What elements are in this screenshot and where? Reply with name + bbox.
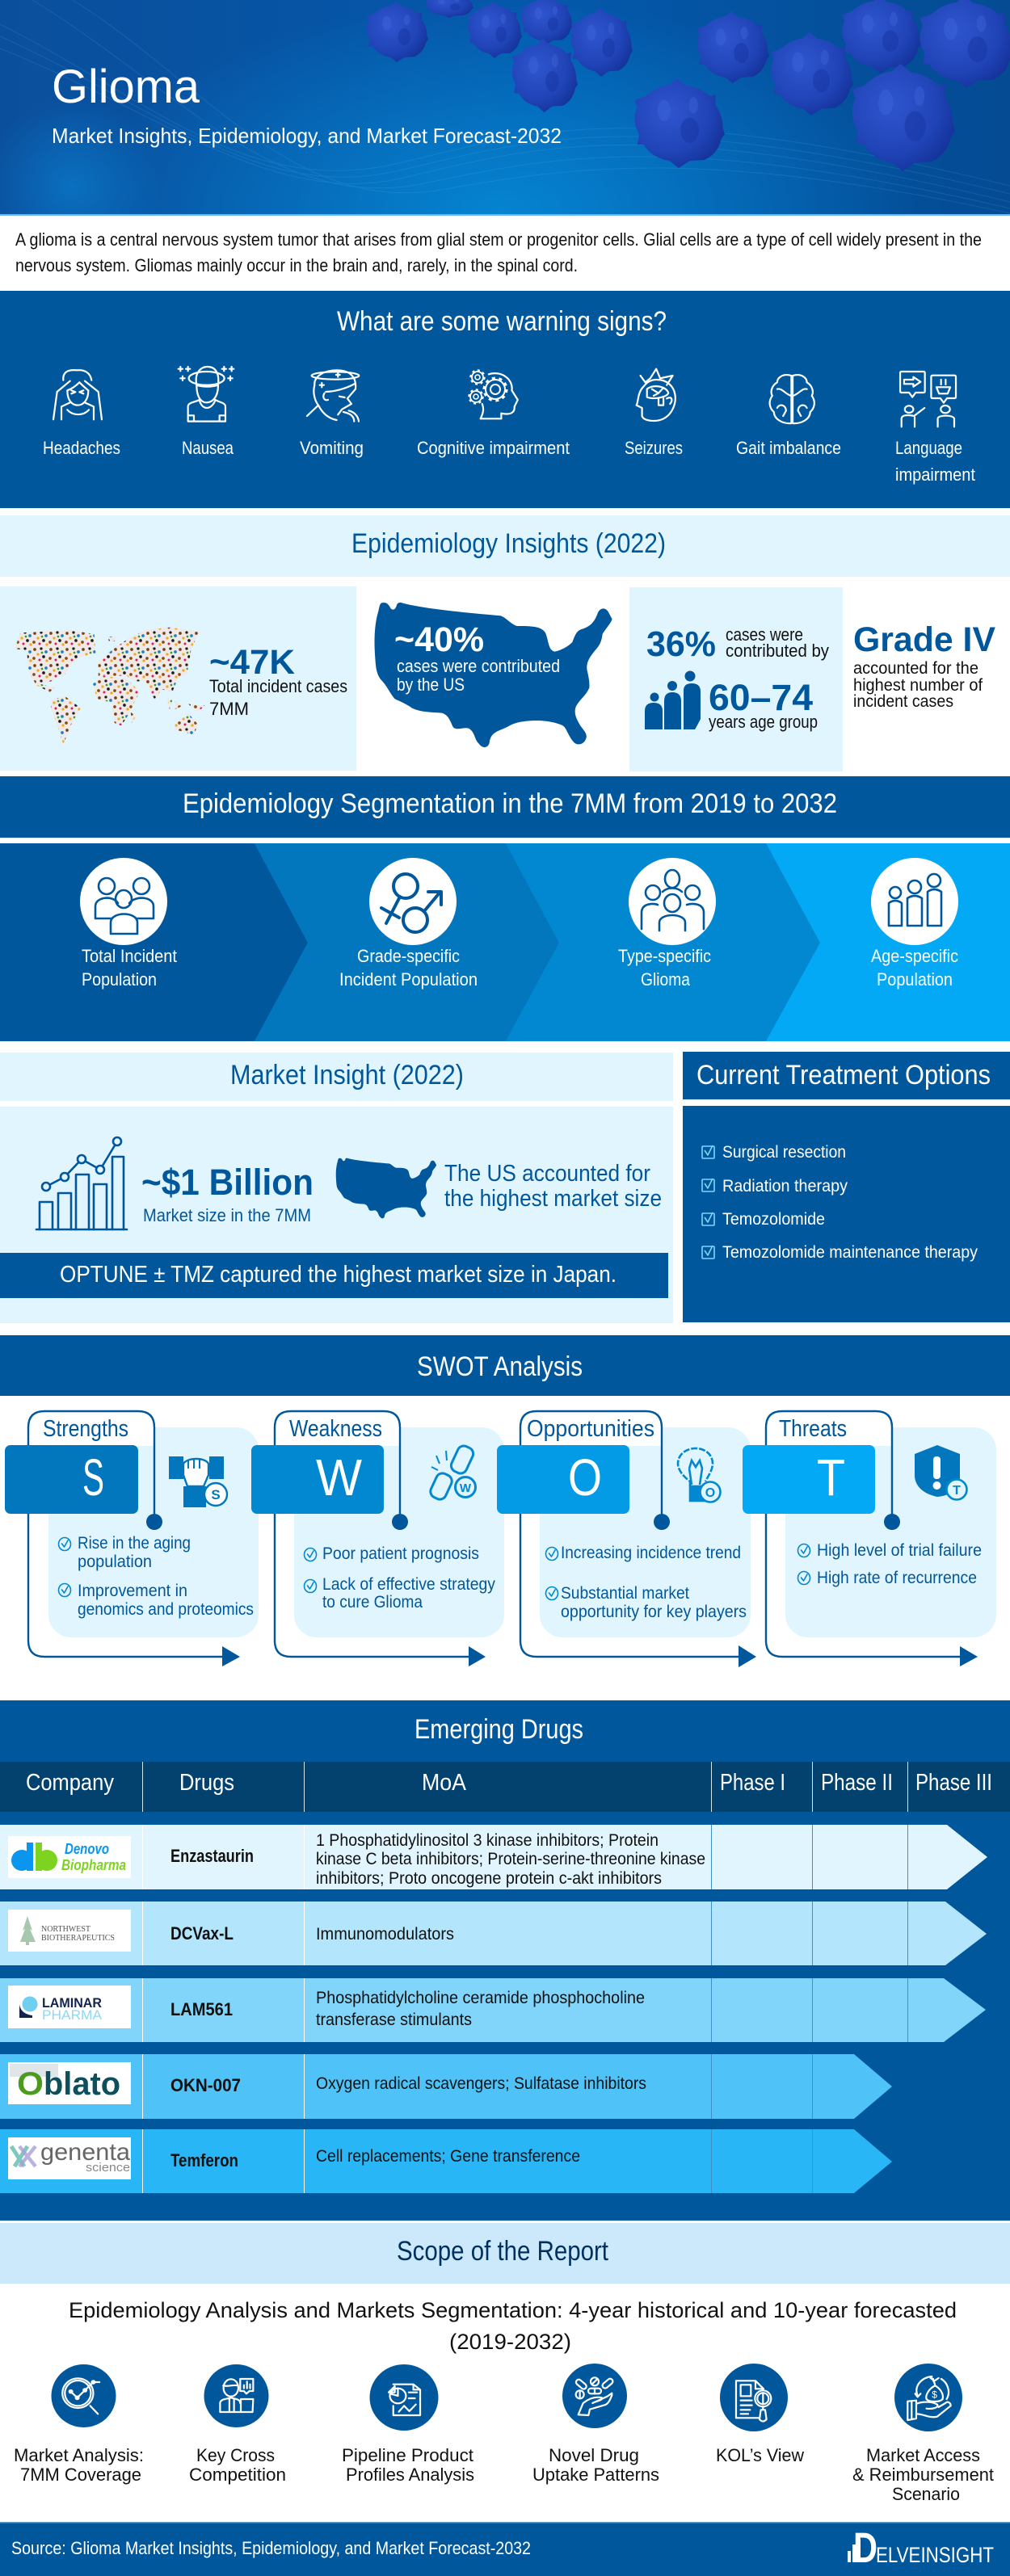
icon: family: [645, 670, 701, 729]
logo: DelveInsight: D: [853, 2524, 877, 2572]
row: DCVax-L: [0, 1902, 987, 1965]
scope: KOL view: [716, 2364, 804, 2465]
logo: Oblato: O: [17, 2066, 44, 2102]
heading: scope of the report: Scope of the Report: [397, 2236, 608, 2267]
callout: grade IV: [853, 620, 995, 711]
scope: novel drug: [532, 2364, 659, 2485]
warning sign labels: Gait imbalance: [736, 438, 841, 458]
panel: market insight: [0, 1107, 673, 1323]
logo: Laminar Pharma: LAMINAR: [42, 1995, 102, 2011]
heading: SWOT: [0, 1335, 1010, 1396]
panel: strengths: S: [82, 1448, 104, 1507]
stat label: Market size in the 7MM: [143, 1205, 311, 1225]
row: Temferon: Cell replacements; Gene transference: [316, 2147, 580, 2166]
weakness list: Poor patient prognosis: [322, 1544, 479, 1563]
row: DCVax-L: DCVax-L: [170, 1923, 234, 1944]
intro text: nervous system. Gliomas mainly occur in the brain and, rarely, in the spinal cord.: [15, 255, 578, 275]
heading: market insight: Market Insight (2022): [230, 1060, 464, 1090]
icon: light bulb: O: [705, 1486, 715, 1500]
panel: opportunities: Opportunities: [527, 1416, 654, 1442]
icon: market chart: [36, 1137, 127, 1229]
stat: 1 billion: ~$1 Billion: [141, 1162, 314, 1203]
warning sign labels: Nausea: [182, 438, 234, 458]
logo: Denovo Biopharma: Biopharma: [61, 1857, 126, 1873]
warning sign labels: Vomiting: [300, 438, 364, 458]
scope: key cross competition: [189, 2364, 286, 2485]
logo: Laminar Pharma: [8, 1986, 131, 2028]
callout: grade IV: incident cases: [853, 692, 953, 711]
table header: Phase I: [720, 1770, 785, 1796]
source text: Source: Glioma Market Insights, Epidemiology, and Market Forecast-2032: [11, 2538, 531, 2558]
panel: strengths: [5, 1411, 259, 1666]
footer: [0, 2522, 1010, 2576]
logo: Denovo Biopharma: Denovo: [65, 1841, 109, 1857]
row: Temferon: Temferon: [170, 2150, 238, 2170]
heading: scope of the report: [0, 2223, 1010, 2284]
treatment list: Temozolomide: [722, 1210, 825, 1229]
panel: emerging drugs: [0, 1700, 1010, 2221]
panel: threats: Threats: [779, 1416, 847, 1442]
panel: weakness: [251, 1411, 504, 1666]
strengths list: genomics and proteomics: [78, 1600, 254, 1619]
table header: MoA: [422, 1770, 467, 1796]
row: Enzastaurin: inhibitors; Proto oncogene protein c-akt inhibitors: [316, 1869, 662, 1888]
world map: [15, 628, 204, 745]
panel: total incident cases: [0, 586, 356, 771]
icon: cognitive impairment: [469, 370, 518, 418]
heading: epidemiology insights: [0, 515, 1010, 577]
strengths list: Rise in the aging: [78, 1534, 191, 1553]
US market text: the highest market size: [444, 1186, 662, 1212]
scope: novel drug: Novel Drug: [549, 2445, 639, 2465]
stat: 40%: ~40%: [394, 620, 484, 659]
warning sign labels: Seizures: [625, 438, 683, 458]
stat label: cases were: [726, 624, 803, 645]
warning sign labels: impairment: [895, 464, 975, 485]
row: Temferon: [0, 2129, 892, 2193]
scope: market access: [852, 2364, 994, 2504]
scope: pipeline product: Pipeline Product: [342, 2445, 473, 2465]
header banner: [0, 0, 1010, 216]
scope text: (2019-2032): [449, 2330, 571, 2354]
logo: Northwest Biotherapeutics: [8, 1910, 131, 1952]
opportunities list: Increasing incidence trend: [561, 1544, 741, 1562]
row: Enzastaurin: [0, 1825, 987, 1889]
heading: epidemiology insights: Epidemiology Insights (2022): [351, 528, 666, 559]
warning sign labels: Language: [895, 438, 962, 458]
icon: light bulb: [678, 1448, 721, 1502]
heading: emerging drugs: Emerging Drugs: [415, 1714, 583, 1745]
row: Enzastaurin: kinase C beta inhibitors; Protein-serine-threonine kinase: [316, 1850, 705, 1868]
logo: DelveInsight: [848, 2524, 994, 2572]
icon: gait imbalance: [770, 375, 814, 423]
title: Glioma: [52, 61, 200, 113]
scope: market access: $: [932, 2389, 937, 2400]
table header: Phase III: [915, 1770, 992, 1796]
row: Enzastaurin: Enzastaurin: [170, 1846, 254, 1866]
panel: US share: [375, 603, 612, 747]
segment: age-specific: [871, 858, 958, 990]
opportunities list: Substantial market: [561, 1584, 689, 1603]
logo: Genenta: genenta: [40, 2139, 130, 2166]
threats list: High level of trial failure: [817, 1541, 982, 1560]
stat: 60-74: 60–74: [709, 677, 813, 718]
heading: market insight: [0, 1053, 673, 1101]
scope text: Epidemiology Analysis and Markets Segmentation: 4-year historical and 10-year forecasted: [69, 2298, 957, 2322]
treatment list: Radiation therapy: [722, 1177, 848, 1196]
scope text: [69, 2298, 957, 2354]
stat: 47K: ~47K: [209, 643, 295, 682]
logo: Denovo Biopharma: [8, 1836, 131, 1878]
scope: pipeline product: [342, 2364, 474, 2485]
weakness list: [304, 1544, 495, 1612]
stat label: [209, 676, 347, 719]
heading: current treatment options: [683, 1052, 1010, 1099]
panel: warning signs: [0, 291, 1010, 508]
strengths list: population: [78, 1553, 152, 1571]
subtitle: Market Insights, Epidemiology, and Market Forecast-2032: [52, 124, 562, 148]
segment: grade-specific: Incident Population: [339, 969, 478, 990]
intro text: [15, 229, 982, 275]
stat label: by the US: [397, 674, 465, 695]
opportunities list: opportunity for key players: [561, 1603, 747, 1621]
panel: threats: T: [817, 1448, 845, 1507]
US map: [375, 603, 612, 747]
heading: epidemiology segmentation: [0, 776, 1010, 838]
table header: [0, 1762, 1010, 1812]
logo: Genenta: [8, 2137, 131, 2179]
table header: Drugs: [179, 1770, 234, 1796]
US map small: [336, 1158, 436, 1218]
row: OKN-007: Oxygen radical scavengers; Sulfatase inhibitors: [316, 2074, 646, 2093]
heading: SWOT: SWOT Analysis: [417, 1351, 583, 1382]
panel: weakness: W: [316, 1448, 363, 1507]
row: OKN-007: [0, 2054, 892, 2119]
scope: market access: & Reimbursement: [852, 2465, 994, 2485]
strengths list: Improvement in: [78, 1582, 187, 1600]
icon: shield: [915, 1445, 966, 1499]
panel: weakness: Weakness: [289, 1416, 382, 1442]
callout: grade IV: accounted for the: [853, 659, 978, 678]
row: LAM561: Phosphatidylcholine ceramide phosphocholine: [316, 1989, 645, 2007]
threats list: High rate of recurrence: [817, 1569, 977, 1587]
glioma cells: [367, 0, 1010, 171]
logo: Northwest Biotherapeutics: BIOTHERAPEUTICS: [41, 1933, 115, 1943]
strengths list: [58, 1534, 254, 1619]
row: Enzastaurin: 1 Phosphatidylinositol 3 kinase inhibitors; Protein: [316, 1831, 659, 1850]
panel: threats: [743, 1411, 996, 1666]
warning sign labels: Headaches: [43, 438, 120, 458]
segment: grade-specific: [339, 858, 478, 990]
scope: market access: Scenario: [892, 2484, 960, 2504]
icon: fist: S: [211, 1487, 221, 1502]
scope: KOL view: KOL’s View: [716, 2445, 804, 2465]
icon: fist: [169, 1456, 227, 1507]
row: LAM561: [0, 1978, 986, 2042]
threats list: [798, 1541, 982, 1587]
icon: broken chain: W: [460, 1481, 472, 1495]
weakness list: to cure Glioma: [322, 1593, 423, 1612]
stat label: [397, 656, 560, 695]
segment: total incident population: [80, 858, 177, 990]
stat: 36%: 36%: [646, 624, 716, 664]
scope: novel drug: Uptake Patterns: [532, 2465, 659, 2485]
callout: optune: [0, 1253, 668, 1298]
segment: total incident population: Population: [82, 969, 157, 990]
scope: key cross competition: Competition: [189, 2465, 286, 2485]
panel: opportunities: [497, 1411, 756, 1667]
icon: nausea: [179, 367, 234, 422]
logo: Oblato: blato: [44, 2066, 120, 2102]
segment: age-specific: Age-specific: [871, 946, 958, 966]
US market text: The US accounted for: [444, 1161, 650, 1187]
icon: vomiting: [307, 370, 359, 422]
heading: warning signs: What are some warning signs?: [337, 306, 667, 337]
scope: market analysis: 7MM Coverage: [20, 2465, 141, 2485]
row: OKN-007: OKN-007: [170, 2075, 241, 2095]
segment: age-specific: Population: [877, 969, 953, 990]
logo: Northwest Biotherapeutics: NORTHWEST: [41, 1924, 90, 1934]
segment: type-specific: [618, 858, 716, 990]
panel: age group: [629, 587, 843, 771]
segment: type-specific: Glioma: [641, 969, 691, 990]
stat label: cases were contributed: [397, 656, 560, 676]
treatment list: Temozolomide maintenance therapy: [722, 1243, 978, 1262]
table header: Phase II: [821, 1770, 893, 1796]
treatment list: Surgical resection: [722, 1143, 846, 1162]
stat label: 7MM: [209, 699, 249, 719]
scope: key cross competition: Key Cross: [196, 2445, 275, 2465]
warning sign labels: [43, 438, 975, 485]
stat label: years age group: [709, 712, 818, 732]
panel: treatment options: [683, 1106, 1010, 1322]
panel: segmentation chevrons: [0, 843, 1010, 1041]
icon: language impairment: [900, 372, 956, 427]
logo: Genenta: science: [86, 2161, 130, 2175]
row: DCVax-L: Immunomodulators: [316, 1925, 454, 1944]
callout: optune: OPTUNE ± TMZ captured the highest market size in Japan.: [60, 1262, 617, 1288]
stat label: Total incident cases: [209, 676, 347, 696]
scope: market analysis: Market Analysis:: [14, 2445, 144, 2465]
logo: Laminar Pharma: PHARMA: [42, 2007, 103, 2023]
icon: broken chain: [428, 1443, 475, 1502]
panel: opportunities: O: [568, 1448, 602, 1507]
row: LAM561: transferase stimulants: [316, 2011, 472, 2029]
row: LAM561: LAM561: [170, 1999, 233, 2019]
stat label: [726, 624, 829, 661]
segment: type-specific: Type-specific: [618, 946, 711, 966]
table header: Company: [26, 1770, 114, 1796]
icon: headaches: [53, 370, 102, 419]
segment: total incident population: Total Incident: [82, 946, 177, 966]
heading: epidemiology segmentation: Epidemiology Segmentation in the 7MM from 2019 to 2032: [183, 788, 837, 819]
weakness list: Lack of effective strategy: [322, 1575, 495, 1594]
stat label: contributed by: [726, 641, 829, 661]
panel: strengths: Strengths: [43, 1416, 128, 1442]
icon: seizures: [637, 369, 675, 421]
scope: market access: Market Access: [866, 2445, 980, 2465]
segment: grade-specific: Grade-specific: [357, 946, 460, 966]
US market text: [444, 1161, 662, 1212]
icon: shield: T: [953, 1484, 961, 1498]
callout: grade IV: Grade IV: [853, 620, 995, 659]
warning sign labels: Cognitive impairment: [417, 438, 570, 458]
callout: grade IV: highest number of: [853, 676, 983, 695]
scope: market analysis: [14, 2364, 144, 2485]
opportunities list: [546, 1544, 747, 1621]
scope: pipeline product: Profiles Analysis: [346, 2465, 474, 2485]
logo: Oblato: [8, 2062, 131, 2104]
treatment list: [702, 1143, 978, 1262]
